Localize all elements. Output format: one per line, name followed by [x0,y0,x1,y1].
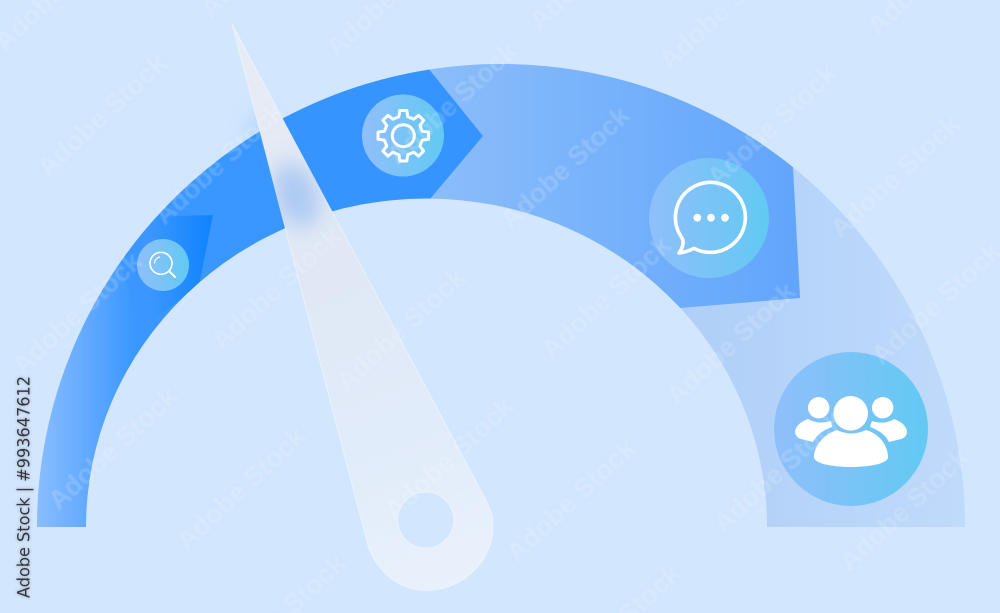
icon: people group [774,352,928,506]
watermark pattern: Adobe Stock [660,276,802,411]
icon: gear [362,94,444,176]
segment 1 arrow tip [120,215,213,312]
needle glow behind band [246,112,274,148]
watermark pattern: Adobe Stock [707,404,849,539]
segment 1: gradient blue [37,132,282,527]
needle [232,24,493,591]
watermark pattern: Adobe Stock [494,100,636,235]
watermark pattern: Adobe Stock [535,230,677,365]
stock id caption: Adobe Stock | #993647612 [14,376,34,598]
watermark pattern: Adobe Stock [701,58,843,193]
watermark pattern: Adobe Stock [6,246,148,381]
watermark pattern: Adobe Stock [833,442,975,577]
icon: chat bubble [649,158,769,278]
frosted blur of band through needle [264,156,328,234]
watermark pattern: Adobe Stock [31,48,173,183]
watermark pattern: Adobe Stock [824,109,966,244]
watermark pattern: Adobe Stock [381,36,523,171]
watermark pattern: Adobe Stock [170,421,312,556]
segment 2: blue arrow [240,70,483,252]
segment 4: lightest base [37,64,965,527]
segment 3: medium blue arrow [428,40,800,308]
watermark pattern: Adobe Stock [378,391,520,526]
watermark pattern: Adobe Stock [500,433,642,568]
watermark pattern: Adobe Stock [148,96,290,231]
watermark pattern: Adobe Stock [42,381,184,516]
watermark pattern: Adobe Stock [205,221,347,356]
gauge band [37,64,965,527]
icon: magnifier [137,239,189,291]
watermark pattern: Adobe Stock [330,262,472,397]
